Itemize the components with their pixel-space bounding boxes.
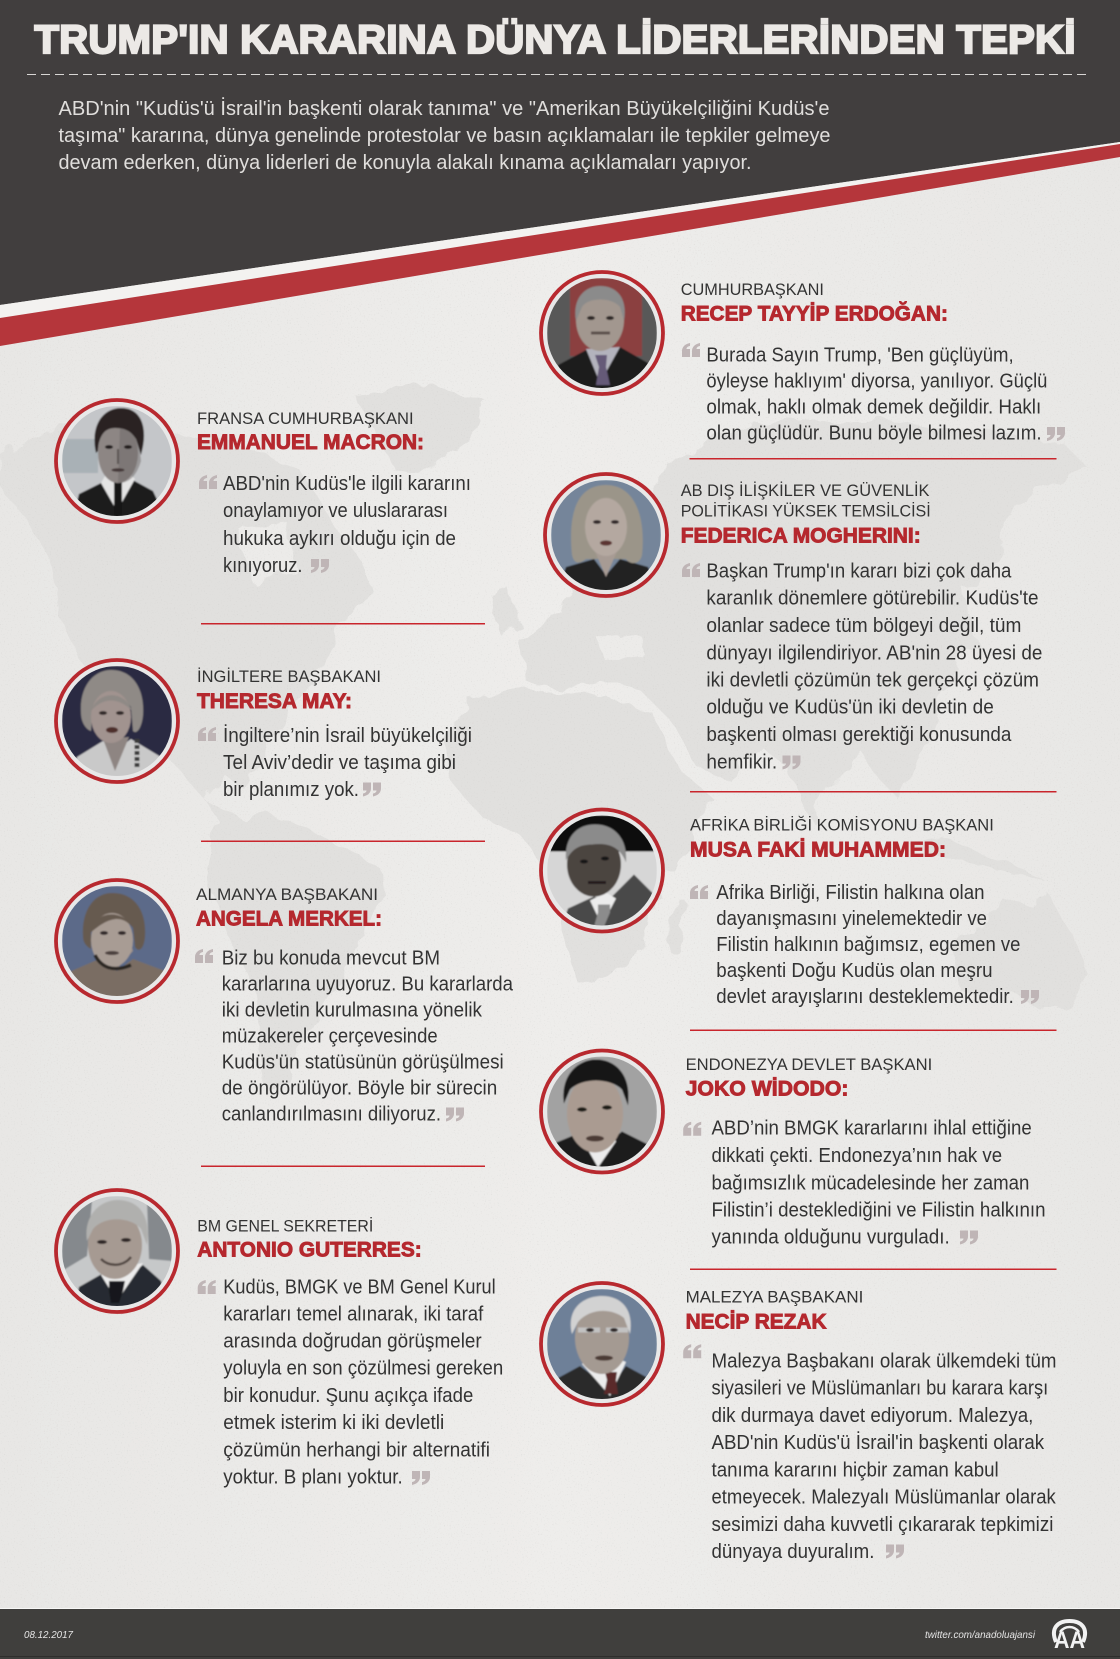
- role: FRANSA CUMHURBAŞKANI: [197, 409, 414, 428]
- quote: [198, 724, 472, 801]
- role: POLİTİKASI YÜKSEK TEMSİLCİSİ: [681, 502, 931, 521]
- world map background: [0, 385, 1090, 1100]
- quote: başkenti olması gerektiği konusunda: [706, 724, 1012, 746]
- name: FEDERICA MOGHERINI:: [681, 524, 921, 547]
- role: İNGİLTERE BAŞBAKANI: [197, 667, 381, 686]
- quote: Afrika Birliği, Filistin halkına olan: [716, 882, 984, 904]
- panel: Angela Merkel: [56, 880, 514, 1167]
- quote: olduğu ve Kudüs'ün iki devletin de: [706, 697, 994, 719]
- role: ALMANYA BAŞBAKANI: [196, 885, 378, 904]
- portrait: Guterres: [56, 1190, 178, 1312]
- role: [681, 481, 931, 521]
- portrait: Rezak: [541, 1283, 663, 1405]
- date: 08.12.2017: [24, 1630, 73, 1641]
- quote: bir planımız yok.: [223, 779, 359, 801]
- quote: Malezya Başbakanı olarak ülkemdeki tüm: [712, 1350, 1056, 1372]
- panel: Recep Tayyip Erdoğan: [541, 272, 1065, 460]
- quote: hukuka aykırı olduğu için de: [223, 528, 456, 550]
- quote: [198, 1276, 503, 1488]
- quote: siyasileri ve Müslümanları bu karara karşı: [712, 1378, 1048, 1400]
- quote: onaylamıyor ve uluslararası: [223, 500, 448, 522]
- quote: ABD’nin BMGK kararlarını ihlal ettiğine: [712, 1118, 1032, 1140]
- portrait: Musa: [541, 810, 663, 932]
- name: EMMANUEL MACRON:: [197, 431, 424, 454]
- panel: Theresa May: [56, 660, 485, 842]
- name: JOKO WİDODO:: [686, 1078, 848, 1101]
- name: ANTONIO GUTERRES:: [197, 1239, 422, 1262]
- quote: [682, 561, 1042, 773]
- quote: [199, 473, 471, 577]
- quote: Kudüs'ün statüsünün görüşülmesi: [222, 1051, 504, 1073]
- quote: dayanışmasını yinelemektedir ve: [716, 908, 987, 930]
- panel: Joko Widodo: [541, 1050, 1056, 1270]
- twitter handle: twitter.com/anadoluajansi: [925, 1629, 1036, 1641]
- quote: dünyaya duyuralım.: [712, 1541, 874, 1563]
- quote: yoktur. B planı yoktur.: [223, 1466, 403, 1488]
- quote: müzakereler çerçevesinde: [222, 1026, 438, 1048]
- quote: Filistin’i desteklediğini ve Filistin halkının: [712, 1200, 1046, 1222]
- quote: sesimizi daha kuvvetli çıkararak tepkimizi: [712, 1514, 1053, 1536]
- role: MALEZYA BAŞBAKANI: [686, 1287, 863, 1306]
- intro text: taşıma" kararına, dünya genelinde protestolar ve basın açıklamaları ile tepkiler gelmeye: [58, 125, 830, 147]
- quote: etmeyecek. Malezyalı Müslümanlar olarak: [712, 1487, 1057, 1509]
- quote: [195, 947, 514, 1125]
- quote: ABD'nin Kudüs'le ilgili kararını: [223, 473, 471, 495]
- quote: bağımsızlık mücadelesinde her zaman: [712, 1172, 1029, 1194]
- panel: Necip Rezak: [541, 1283, 1057, 1563]
- name: MUSA FAKİ MUHAMMED:: [690, 839, 946, 862]
- quote: [683, 1344, 1057, 1563]
- panel: Federica Mogherini: [545, 474, 1056, 792]
- quote: canlandırılmasını diliyoruz.: [222, 1103, 441, 1125]
- role: CUMHURBAŞKANI: [681, 280, 824, 299]
- panel: Musa Faki Muhammed: [541, 810, 1056, 1031]
- quote: arasında doğrudan görüşmeler: [223, 1331, 482, 1353]
- quote: İngiltere’nin İsrail büyükelçiliği: [223, 724, 472, 747]
- quote: [690, 882, 1039, 1008]
- quote: dünyayı ilgilendiriyor. AB'nin 28 üyesi de: [706, 642, 1042, 664]
- quote: kararlarına uyuyoruz. Bu kararlarda: [222, 974, 514, 996]
- quote: ABD'nin Kudüs'ü İsrail'in başkenti olarak: [712, 1431, 1045, 1454]
- quote: karanlık dönemlere götürebilir. Kudüs'te: [706, 588, 1039, 610]
- quote: Tel Aviv’dedir ve taşıma gibi: [223, 752, 456, 774]
- portrait: Mogherini: [545, 474, 667, 596]
- quote: öyleyse haklıyım' diyorsa, yanılıyor. Güçlü: [706, 370, 1047, 392]
- name: NECİP REZAK: [686, 1310, 826, 1333]
- quote: dikkati çekti. Endonezya’nın hak ve: [712, 1145, 1002, 1167]
- role: ENDONEZYA DEVLET BAŞKANI: [686, 1055, 932, 1074]
- name: THERESA MAY:: [197, 690, 352, 713]
- intro text: devam ederken, dünya liderleri de konuyla alakalı kınama açıklamaları yapıyor.: [58, 152, 752, 174]
- quote: başkenti Doğu Kudüs olan meşru: [716, 960, 992, 982]
- quote: olanlar sadece tüm bölgeyi değil, tüm: [706, 615, 1021, 637]
- quote: yanında olduğunu vurguladı.: [712, 1227, 950, 1249]
- role: AB DIŞ İLİŞKİLER VE GÜVENLİK: [681, 481, 930, 500]
- quote: olan güçlüdür. Bunu böyle bilmesi lazım.: [706, 422, 1042, 444]
- quote: de öngörülüyor. Böyle bir sürecin: [222, 1077, 497, 1099]
- quote: [682, 343, 1065, 444]
- quote: etmek isterim ki iki devletli: [223, 1412, 444, 1434]
- header: dark diagonal band: [0, 0, 1120, 346]
- portrait: Macron: [56, 400, 178, 522]
- quote: Kudüs, BMGK ve BM Genel Kurul: [223, 1276, 496, 1298]
- name: RECEP TAYYİP ERDOĞAN:: [681, 302, 948, 326]
- quote: Başkan Trump'ın kararı bizi çok daha: [706, 561, 1012, 583]
- quote: Filistin halkının bağımsız, egemen ve: [716, 934, 1020, 956]
- quote: tanıma kararını hiçbir zaman kabul: [712, 1459, 999, 1481]
- role: AFRİKA BİRLİĞİ KOMİSYONU BAŞKANI: [690, 816, 994, 835]
- panel: Emmanuel Macron: [56, 400, 485, 624]
- portrait: Merkel: [56, 880, 178, 1002]
- quote: çözümün herhangi bir alternatifi: [223, 1439, 490, 1461]
- role: BM GENEL SEKRETERİ: [197, 1216, 373, 1235]
- quote: yoluyla en son çözülmesi gereken: [223, 1358, 503, 1380]
- intro text: [58, 97, 830, 174]
- quote: olmak, haklı olmak demek değildir. Haklı: [706, 396, 1041, 418]
- footer bar: [0, 1608, 1120, 1659]
- portrait: May: [56, 660, 178, 782]
- quote: Biz bu konuda mevcut BM: [222, 947, 440, 969]
- quote: iki devletin kurulmasına yönelik: [222, 1000, 483, 1022]
- quote: kınıyoruz.: [223, 555, 302, 577]
- quote: devlet arayışlarını desteklemektedir.: [716, 986, 1014, 1008]
- portrait: Erdoğan: [541, 272, 663, 394]
- title: TRUMP'IN KARARINA DÜNYA LİDERLERİNDEN TEPKİ: [34, 17, 1076, 62]
- name: ANGELA MERKEL:: [196, 908, 382, 931]
- quote: hemfikir.: [706, 751, 777, 773]
- portrait: Joko: [541, 1050, 663, 1172]
- icon: Anadolu Agency logo: AA: [1054, 1627, 1085, 1654]
- quote: bir konudur. Şunu açıkça ifade: [223, 1385, 473, 1407]
- panel: Antonio Guterres: [56, 1190, 503, 1488]
- quote: dik durmaya davet ediyorum. Malezya,: [712, 1405, 1033, 1427]
- quote: [683, 1118, 1046, 1249]
- intro text: ABD'nin "Kudüs'ü İsrail'in başkenti olarak tanıma" ve "Amerikan Büyükelçiliğini Kudüs'e: [58, 97, 830, 120]
- quote: Burada Sayın Trump, 'Ben güçlüyüm,: [706, 345, 1014, 367]
- quote: iki devletli çözümün tek gerçekçi çözüm: [706, 669, 1039, 691]
- quote: kararları temel alınarak, iki taraf: [223, 1303, 484, 1325]
